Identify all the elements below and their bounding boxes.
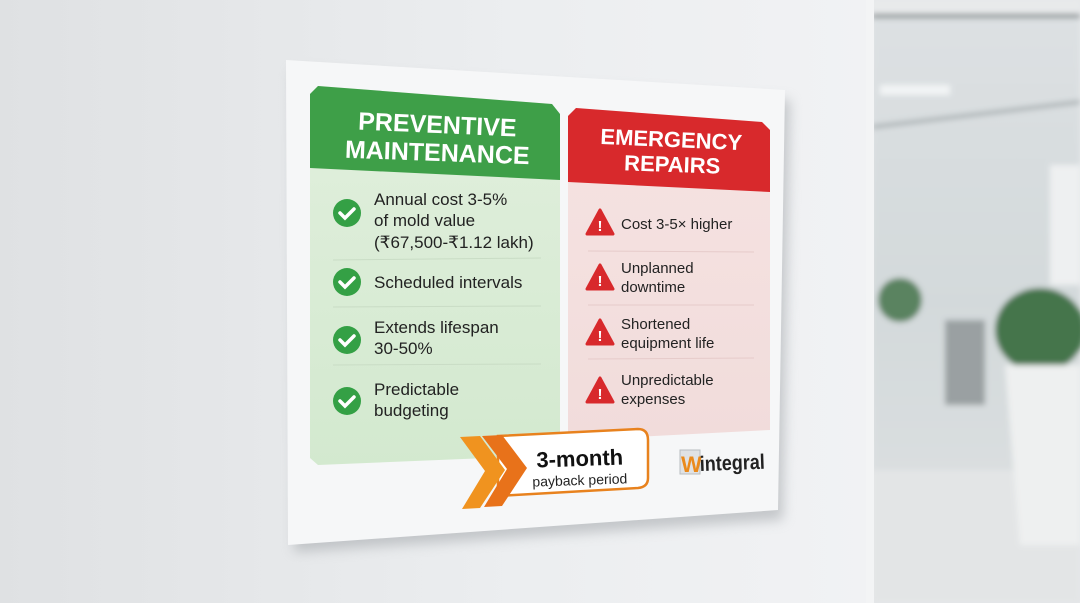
icon: orange chevrons <box>460 435 527 509</box>
item: downtime: downtime <box>621 279 685 296</box>
item: downtime: ! <box>598 273 602 290</box>
item: scheduled: Scheduled intervals <box>374 273 522 292</box>
item: shortened life: Shortened <box>621 316 690 333</box>
item: downtime: Unplanned <box>621 260 694 277</box>
item: lifespan <box>333 318 499 358</box>
item: shortened life <box>587 316 714 352</box>
heading: emergency repairs: EMERGENCY <box>600 124 743 155</box>
heading: emergency repairs <box>568 108 770 192</box>
item: unpredictable <box>587 372 714 408</box>
heading: emergency repairs: REPAIRS <box>624 150 721 179</box>
callout: 3-month payback <box>460 429 648 509</box>
item: cost higher: ! <box>598 218 602 235</box>
sign board <box>286 60 790 552</box>
logo: wintegral <box>680 450 765 477</box>
item: shortened life: equipment life <box>621 335 714 352</box>
panel: emergency repairs <box>568 108 770 440</box>
item: cost higher <box>587 210 732 235</box>
item: budgeting: budgeting <box>374 401 449 420</box>
item: unpredictable: Unpredictable <box>621 372 714 389</box>
item: cost higher: Cost 3-5× higher <box>621 216 732 233</box>
item: annual cost: Annual cost 3-5% <box>374 190 507 209</box>
item: annual cost: of mold value <box>374 211 475 230</box>
item: unpredictable: expenses <box>621 391 685 408</box>
item: downtime <box>587 260 694 296</box>
item: lifespan: Extends lifespan <box>374 318 499 337</box>
callout: 3-month payback: payback period <box>532 470 628 490</box>
item: annual cost: (₹67,500-₹1.12 lakh) <box>374 233 534 252</box>
item: unpredictable: ! <box>598 386 602 403</box>
item: shortened life: ! <box>598 328 602 345</box>
logo: wintegral: integral <box>699 451 765 476</box>
heading: preventive maintenance: PREVENTIVE <box>358 108 517 142</box>
item: budgeting: Predictable <box>374 380 459 399</box>
callout: 3-month payback: 3-month <box>536 444 624 473</box>
item: lifespan: 30-50% <box>374 339 433 358</box>
heading: preventive maintenance <box>310 86 560 180</box>
item: budgeting <box>333 380 459 420</box>
panel: preventive maintenance <box>310 86 560 465</box>
heading: preventive maintenance: MAINTENANCE <box>344 136 530 170</box>
logo: wintegral: W <box>681 452 702 477</box>
background office scene <box>872 0 1080 603</box>
item: annual cost <box>333 190 534 252</box>
item: scheduled <box>333 268 522 296</box>
